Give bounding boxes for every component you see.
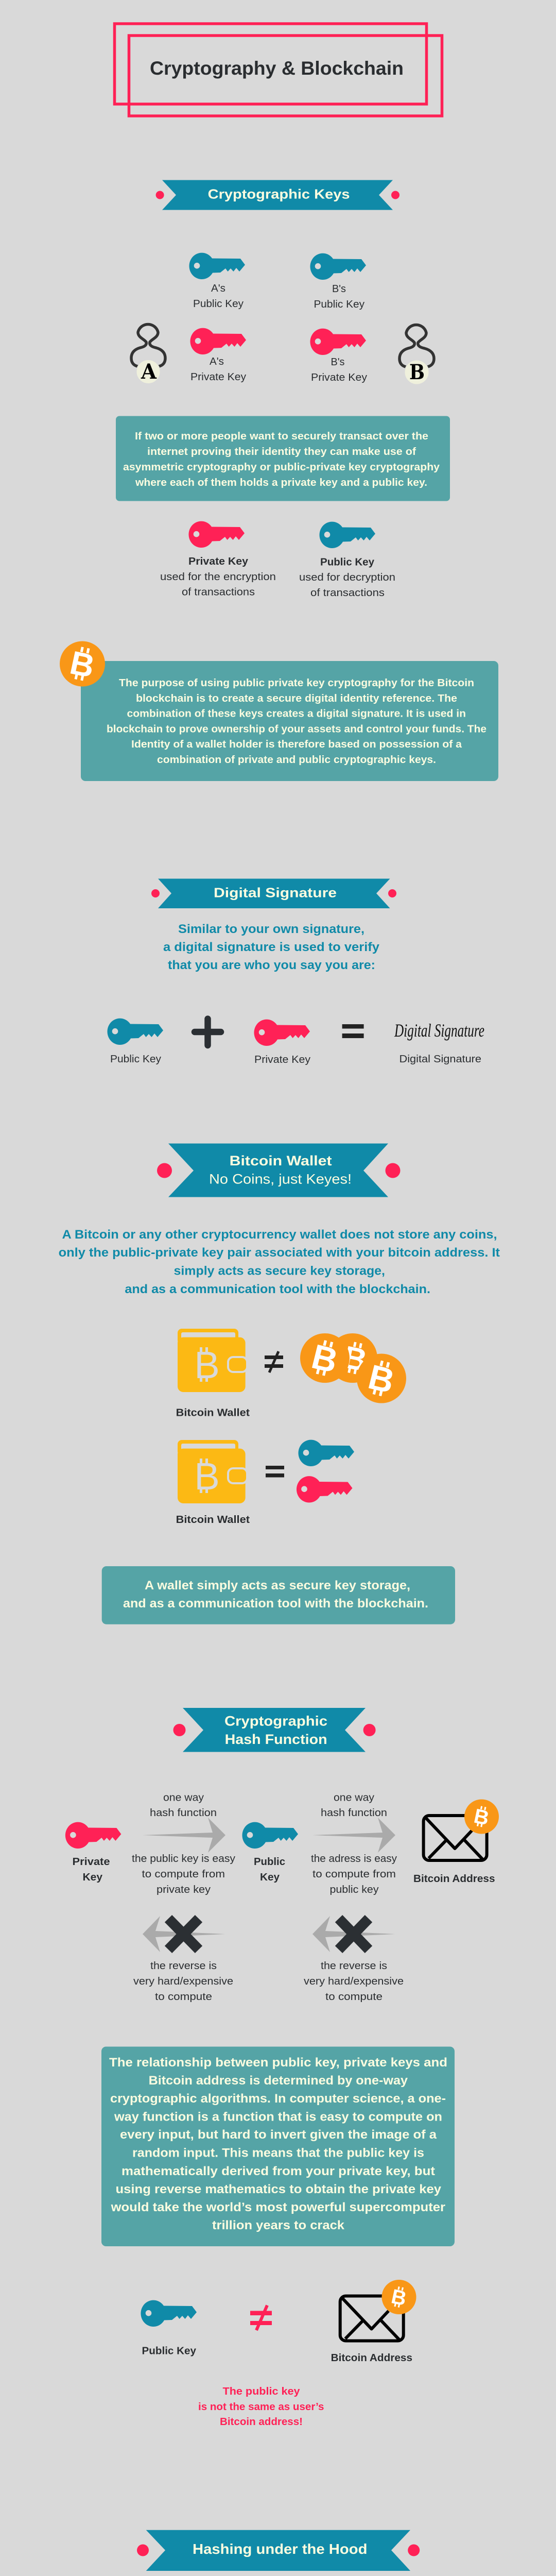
banner: Cryptographic Hash Function — [173, 1708, 376, 1752]
panel: purpose of public private keys: Identity of a wallet holder is therefore based on possession of a — [131, 739, 462, 750]
text: one way hash function: hash function — [150, 1807, 217, 1819]
icon: bitcoin wallet: B — [194, 1455, 220, 1498]
banner: Bitcoin Wallet: Bitcoin Wallet — [230, 1153, 332, 1168]
icon: person B — [399, 325, 434, 384]
text: one way hash function — [150, 1792, 217, 1819]
label: digital signature: Digital Signature — [399, 1054, 481, 1065]
icon: B's private key — [310, 329, 366, 355]
icon: bitcoin coin — [60, 641, 105, 686]
text: wallet explanation — [59, 1228, 500, 1296]
icon: bitcoin wallet: B — [194, 1344, 220, 1386]
icon: bitcoin wallet — [178, 1329, 247, 1392]
panel: relationship of keys: cryptographic algorithms. In computer science, a one- — [110, 2092, 446, 2106]
icon: private key — [254, 1020, 310, 1046]
panel: wallet summary — [102, 1566, 455, 1624]
title — [114, 24, 442, 116]
label: B's public key — [314, 283, 364, 310]
callout: public key is not address: Bitcoin address! — [220, 2416, 303, 2428]
text: digital signature intro: a digital signature is used to verify — [163, 940, 380, 954]
text: reverse is hard — [304, 1960, 404, 2003]
icon: person B: B — [409, 360, 425, 384]
label: A's public key: A's — [211, 283, 225, 294]
label: public key: Public — [254, 1856, 285, 1868]
panel: relationship of keys — [101, 2046, 455, 2246]
icon: bitcoin wallet — [178, 1440, 247, 1503]
text: private key usage — [160, 556, 276, 598]
icon: bitcoin address envelope: B — [389, 2285, 408, 2310]
panel: asymmetric cryptography: If two or more people want to securely transact over the — [135, 431, 428, 442]
text: easy to compute: private key — [157, 1884, 211, 1895]
label: bitcoin wallet: Bitcoin Wallet — [176, 1514, 250, 1526]
panel: relationship of keys: mathematically derived from your private key, but — [121, 2164, 435, 2178]
panel: wallet summary: A wallet simply acts as secure key storage, — [145, 1579, 410, 1592]
label: private key — [72, 1856, 110, 1883]
text: reverse is hard: very hard/expensive — [133, 1976, 233, 1987]
label: A's private key — [190, 356, 246, 383]
panel: relationship of keys: every input, but hard to invert given the image of a — [120, 2128, 437, 2142]
text: wallet explanation: and as a communication tool with the blockchain. — [125, 1282, 430, 1296]
icon: A's public key — [189, 253, 245, 279]
label: A's private key: Private Key — [190, 371, 246, 383]
text: private key usage: of transactions — [182, 586, 255, 598]
icon: equals — [266, 1466, 284, 1478]
label: public key: Public Key — [110, 1054, 161, 1065]
icon: bitcoin address envelope — [424, 1799, 499, 1860]
panel: relationship of keys: trillion years to crack — [212, 2218, 345, 2232]
label: A's public key: Public Key — [193, 298, 244, 310]
text: digital signature intro — [163, 922, 380, 972]
panel: purpose of public private keys: combination of private and public cryptographic keys. — [157, 754, 436, 766]
text: reverse is hard: the reverse is — [150, 1960, 217, 1972]
text: address easy to compute: to compute from — [312, 1869, 396, 1880]
icon: B's public key — [310, 253, 366, 280]
text: reverse is hard: very hard/expensive — [304, 1976, 404, 1987]
icon: bitcoin coin: B — [67, 643, 98, 685]
banner: Digital Signature — [151, 879, 396, 908]
text: address easy to compute: the adress is easy — [311, 1853, 397, 1865]
banner: Bitcoin Wallet: No Coins, just Keyes! — [209, 1172, 352, 1187]
arrow: reverse public blocked — [312, 1916, 395, 1952]
arrow: private to public — [143, 1818, 225, 1853]
text: one way hash function: one way — [334, 1792, 374, 1803]
icon: not equal — [265, 1351, 283, 1372]
panel: relationship of keys: The relationship between public key, private keys and — [109, 2056, 447, 2070]
banner: Cryptographic Hash Function: Hash Function — [225, 1732, 327, 1747]
text: reverse is hard: the reverse is — [321, 1960, 387, 1972]
text: reverse is hard: to compute — [155, 1991, 212, 2003]
icon: private key — [65, 1822, 121, 1849]
icon: bitcoin coins: B — [364, 1358, 398, 1401]
arrow: reverse private blocked — [143, 1916, 225, 1952]
panel: relationship of keys: way function is a function that is easy to compute on — [114, 2110, 442, 2124]
icon: public key — [242, 1822, 298, 1849]
icon: bitcoin coins: B — [308, 1337, 341, 1381]
label: bitcoin address: Bitcoin Address — [413, 1873, 495, 1885]
label: B's private key: B's — [331, 357, 345, 368]
panel: asymmetric cryptography — [116, 416, 450, 501]
panel: purpose of public private keys: blockchain to prove ownership of your assets and control your funds. The — [107, 723, 486, 735]
icon: plus — [195, 1019, 221, 1045]
text: wallet explanation: A Bitcoin or any other cryptocurrency wallet does not store any coins, — [62, 1228, 497, 1242]
text: easy to compute: to compute from — [142, 1869, 225, 1880]
label: public key — [254, 1856, 285, 1883]
text: public key usage: Public Key — [320, 556, 375, 568]
label: bitcoin address: Bitcoin Address — [331, 2352, 412, 2364]
icon: public key — [319, 522, 375, 548]
text: reverse is hard: to compute — [325, 1991, 383, 2003]
banner: Cryptographic Keys: Cryptographic Keys — [208, 187, 350, 202]
icon: public key — [298, 1440, 354, 1466]
icon: private key — [188, 521, 245, 548]
text: wallet explanation: only the public-private key pair associated with your bitcoin address. It — [59, 1246, 500, 1260]
panel: purpose of public private keys: combination of these keys creates a digital signature. It is used in — [127, 708, 466, 720]
callout: public key is not address: is not the same as user’s — [198, 2401, 324, 2413]
text: private key usage: used for the encryption — [160, 571, 276, 583]
icon: public key — [141, 2300, 197, 2327]
banner: Hashing under the Hood: Hashing under the Hood — [193, 2541, 368, 2557]
label: private key: Private — [72, 1856, 110, 1868]
title: Cryptography & Blockchain — [150, 58, 404, 79]
text: public key usage — [299, 556, 395, 599]
banner: Digital Signature: Digital Signature — [214, 885, 337, 901]
panel: relationship of keys: random input. This means that the public key is — [132, 2146, 424, 2160]
icon: bitcoin coins — [300, 1333, 406, 1403]
panel: asymmetric cryptography: internet proving their identity they can make use of — [147, 446, 416, 457]
panel: wallet summary: and as a communication tool with the blockchain. — [123, 1597, 428, 1611]
banner: Cryptographic Keys — [156, 180, 399, 210]
icon: A's private key — [190, 328, 246, 354]
icon: not equal — [250, 2306, 272, 2330]
icon: person A: A — [141, 360, 157, 384]
text: one way hash function: hash function — [321, 1807, 387, 1819]
label: public key: Public Key — [142, 2345, 197, 2357]
text: address easy to compute: public key — [329, 1884, 379, 1895]
text: one way hash function: one way — [163, 1792, 204, 1803]
icon: public key — [107, 1019, 163, 1045]
text: wallet explanation: simply acts as secure key storage, — [174, 1264, 385, 1278]
icon: person A — [131, 324, 165, 384]
text: one way hash function — [321, 1792, 387, 1819]
icon: bitcoin address envelope — [340, 2280, 416, 2341]
banner: Hashing under the Hood — [137, 2530, 420, 2571]
text: digital signature intro: that you are who you say you are: — [168, 958, 375, 972]
icon: equals — [342, 1024, 364, 1038]
panel: purpose of public private keys: blockchain is to create a secure digital identity reference. The — [136, 693, 457, 704]
label: A's private key: A's — [210, 356, 224, 367]
text: easy to compute: the public key is easy — [132, 1853, 235, 1865]
panel: asymmetric cryptography: asymmetric cryptography or public-private key cryptography — [123, 462, 440, 473]
callout: public key is not address — [198, 2386, 324, 2428]
label: private key: Private Key — [254, 1054, 310, 1065]
panel: relationship of keys: using reverse mathematics to obtain the private key — [115, 2182, 442, 2196]
label: public key: Key — [260, 1872, 280, 1883]
arrow: public to address — [312, 1818, 395, 1853]
text: digital signature intro: Similar to your own signature, — [178, 922, 364, 936]
digital signature script: Digital Signature — [394, 1020, 484, 1041]
label: B's private key — [311, 357, 367, 383]
banner: Cryptographic Hash Function: Cryptographic — [224, 1714, 327, 1729]
text: private key usage: Private Key — [188, 556, 249, 567]
panel: purpose of public private keys — [81, 661, 498, 781]
text: address easy to compute — [311, 1853, 397, 1895]
icon: bitcoin address envelope: B — [472, 1805, 491, 1830]
label: bitcoin wallet: Bitcoin Wallet — [176, 1407, 250, 1418]
label: B's public key: B's — [332, 283, 346, 295]
icon: private key — [297, 1476, 352, 1503]
panel: asymmetric cryptography: where each of them holds a private key and a public key. — [135, 477, 427, 488]
panel: purpose of public private keys: The purpose of using public private key cryptography for the Bitcoin — [119, 677, 474, 689]
banner: Bitcoin Wallet — [157, 1144, 401, 1197]
label: A's public key — [193, 283, 244, 310]
text: public key usage: used for decryption — [299, 572, 395, 583]
text: reverse is hard — [133, 1960, 233, 2003]
panel: relationship of keys: Bitcoin address is determined by one-way — [149, 2074, 408, 2088]
text: public key usage: of transactions — [310, 587, 385, 599]
label: B's private key: Private Key — [311, 372, 367, 383]
label: B's public key: Public Key — [314, 299, 364, 310]
panel: relationship of keys: would take the world’s most powerful supercomputer — [111, 2200, 445, 2214]
text: easy to compute — [132, 1853, 235, 1895]
label: private key: Key — [82, 1872, 103, 1883]
icon: bitcoin coins: B — [340, 1339, 370, 1378]
callout: public key is not address: The public key — [222, 2386, 300, 2397]
